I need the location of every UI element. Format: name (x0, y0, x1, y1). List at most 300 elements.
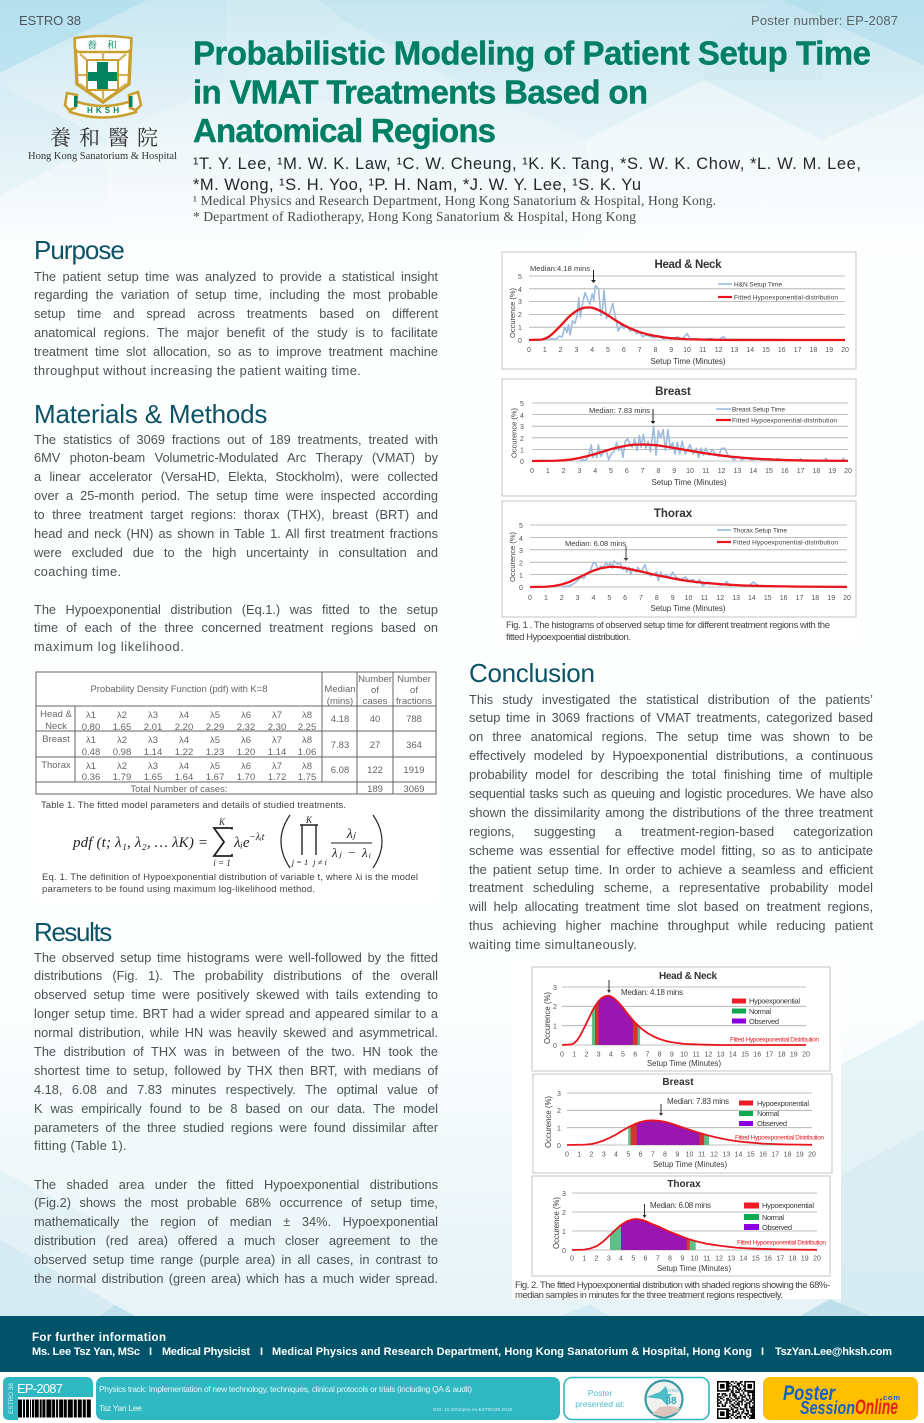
chart: Breast shaded distribution: 20 (808, 1152, 816, 1158)
chart: Thorax shaded distribution: Median: 6.08 mins (650, 1201, 711, 1210)
chart: Thorax shaded distribution: 8 (668, 1256, 672, 1262)
chart: Thorax setup time histogram: 19 (827, 595, 835, 602)
chart: Thorax setup time histogram: 5 (607, 595, 611, 602)
chart: Head & Neck setup time histogram: 1 (543, 347, 547, 354)
chart: Thorax setup time histogram: 9 (671, 595, 675, 602)
chart: Thorax shaded distribution: 6 (644, 1256, 648, 1262)
chart: Head & Neck setup time histogram: 3 (574, 347, 578, 354)
chart: Head & Neck shaded distribution: 15 (741, 1052, 749, 1058)
chart: Head & Neck shaded distribution: Median: 4.18 mins (621, 988, 683, 997)
chart: Thorax shaded distribution: 3 (562, 1191, 566, 1198)
text block: Purpose body: anatomical regions. The major benefit of the study is to facilitate (34, 325, 438, 340)
chart: Head & Neck setup time histogram: 0 (527, 347, 531, 354)
chart: Head & Neck shaded distribution: 4 (609, 1052, 613, 1058)
table 1: 1.65 (144, 772, 162, 783)
chart: Breast setup time histogram: Fitted Hypoexponential-distribution (732, 418, 837, 424)
text block: Conclusion body: waiting time simultaneously. (469, 937, 637, 952)
table 1: 1919 (403, 765, 425, 776)
text block: Conclusion body: sequential tasks such as queuing and logistic procedures. We have also (469, 786, 873, 801)
chart: Breast shaded distribution: 5 (626, 1152, 630, 1158)
chart: Breast shaded distribution: Setup Time (Minutes) (653, 1160, 727, 1169)
table 1: 1.14 (144, 747, 162, 758)
text block: Conclusion body: shown the dissimilarity among the distributions of the three treatment (469, 805, 873, 820)
chart: Head & Neck shaded distribution: 1 (553, 1024, 557, 1030)
chart: Breast shaded distribution: 12 (710, 1152, 718, 1158)
PosterSessionOnline logo (763, 1377, 918, 1420)
table 1: Number (397, 674, 431, 685)
text block: Results second paragraph: observed setup time range (purple area) in all cases, in contrast to (34, 1252, 438, 1267)
chart: Breast shaded distribution: 13 (722, 1152, 730, 1158)
chart: Breast setup time histogram: 3 (577, 468, 581, 475)
chart: Breast shaded distribution: 18 (784, 1152, 791, 1158)
chart: Thorax setup time histogram: 16 (780, 595, 788, 602)
affiliations (193, 193, 716, 224)
QR code (717, 1381, 755, 1419)
table 1: λ2 (117, 761, 127, 772)
footer contact band: I (149, 1346, 152, 1358)
table 1: λ5 (210, 761, 220, 772)
chart: Thorax setup time histogram: 18 (811, 595, 819, 602)
title: Anatomical Regions (193, 112, 496, 149)
chart: Head & Neck shaded distribution: 16 (753, 1052, 761, 1058)
text block: Hypoexponential fit: maximum log likelihood. (34, 639, 184, 654)
text block: Results first paragraph: fitting (Table 1). (34, 1138, 127, 1153)
chart: Head & Neck shaded distribution: 0 (553, 1043, 557, 1050)
chart: Breast setup time histogram: 0 (530, 468, 534, 475)
poster ID box with barcode: EP-2087 (17, 1381, 63, 1396)
chart: Breast setup time histogram: Breast Setup Time (732, 406, 785, 414)
chart: Thorax setup time histogram: 6 (623, 595, 627, 602)
chart: Thorax shaded distribution: 4 (619, 1256, 623, 1262)
table 1: cases (363, 696, 388, 707)
equation 1: j = 1 (291, 857, 308, 867)
chart: Thorax setup time histogram: 5 (519, 523, 523, 530)
chart: Breast setup time histogram: 4 (520, 413, 524, 420)
chart: Breast shaded distribution: 9 (675, 1152, 679, 1158)
chart: Head & Neck setup time histogram: 15 (762, 347, 770, 354)
figure 1 caption (506, 620, 830, 643)
table 1: λ8 (302, 735, 312, 746)
text block: Results second paragraph: distribution (red area) offered a much closer agreement to the (34, 1233, 438, 1248)
chart: Head & Neck shaded distribution: Head & Neck (659, 971, 717, 982)
text block: Results second paragraph (34, 1176, 438, 1286)
table 1: 364 (406, 740, 422, 751)
text block: Hypoexponential fit: The Hypoexponential distribution (Eq.1.) was fitted to the setup (34, 602, 438, 616)
chart: Head & Neck setup time histogram: 11 (699, 347, 707, 354)
table 1: 189 (367, 784, 383, 795)
chart: Breast shaded distribution: 17 (771, 1152, 779, 1158)
table 1: of (371, 685, 379, 696)
chart: Thorax shaded distribution: 17 (776, 1256, 784, 1262)
chart: Thorax shaded distribution: 5 (631, 1256, 635, 1262)
icon: ESTRO 38 badge: ESTRO (664, 1388, 678, 1393)
chart: Thorax setup time histogram: Median: 6.08 mins (565, 539, 626, 548)
chart: Thorax setup time histogram: 2 (519, 560, 523, 568)
chart: Thorax setup time histogram: 4 (591, 595, 595, 602)
affiliations: * Department of Radiotherapy, Hong Kong Sanatorium & Hospital, Hong Kong (193, 209, 636, 224)
chart: Thorax shaded distribution: 20 (813, 1256, 821, 1262)
chart: Thorax shaded distribution: Thorax (667, 1179, 701, 1190)
poster ID box with barcode: ESTRO 38 (8, 1383, 15, 1414)
chart: Head & Neck shaded distribution: 1 (572, 1052, 576, 1058)
heading: Materials & Methods: Materials & Methods (34, 399, 267, 429)
text block: Conclusion body: probability model for describing the total finishing time of multiple (469, 767, 873, 782)
chart: Breast setup time histogram: 3 (520, 424, 524, 431)
text block: Purpose body (34, 268, 438, 378)
chart: Head & Neck shaded distribution: 12 (705, 1052, 712, 1058)
panel: Materials & Methods (34, 399, 438, 654)
text block: Conclusion body: the patient setup time. In order to achieve a seamless and efficient (469, 862, 873, 877)
chart: Head & Neck setup time histogram: Occurence (%) (508, 287, 517, 338)
chart: Breast setup time histogram (502, 379, 856, 496)
chart: Head & Neck setup time histogram: 20 (841, 347, 849, 354)
chart: Head & Neck setup time histogram: 4 (518, 287, 522, 294)
affiliations: ¹ Medical Physics and Research Department, Hong Kong Sanatorium & Hospital, Hong Kong. (193, 193, 716, 208)
chart: Thorax setup time histogram: Occurence (%) (508, 531, 517, 582)
chart: Breast shaded distribution: 15 (747, 1152, 755, 1158)
text block: Results first paragraph: The observed setup time histograms were well-followed by the fitted (34, 950, 438, 964)
chart: Thorax shaded distribution: 12 (715, 1256, 723, 1262)
table 1: λ6 (241, 710, 251, 721)
chart: Thorax setup time histogram: 1 (544, 595, 548, 602)
footer contact band: Ms. Lee Tsz Yan, MSc (32, 1346, 140, 1358)
table 1: Thorax (41, 760, 71, 771)
panel: Results (34, 917, 438, 1286)
equation 1: λᵢe (233, 835, 250, 851)
table 1: 0.48 (82, 747, 100, 758)
table 1: 2.01 (144, 722, 162, 733)
chart: Thorax setup time histogram: 3 (519, 548, 523, 555)
table 1: λ1 (86, 710, 96, 721)
icon: hospital crest: HKSH (87, 106, 119, 115)
text block: Materials body: a linear accelerator (VersaHD, Elekta, Stockholm), were collected (34, 469, 438, 484)
title (193, 34, 871, 149)
chart: Breast shaded distribution: Observed (757, 1119, 787, 1128)
text block: Conclusion body (469, 692, 873, 952)
chart: Thorax setup time histogram: 4 (519, 536, 523, 543)
table 1: 7.83 (331, 740, 349, 751)
header labels (19, 13, 898, 28)
figure 2 caption (515, 1280, 830, 1301)
chart: Thorax shaded distribution: 14 (740, 1256, 747, 1262)
header labels: Poster number: EP-2087 (751, 13, 898, 28)
chart: Breast setup time histogram: 11 (702, 468, 710, 475)
chart: Head & Neck setup time histogram: 16 (778, 347, 786, 354)
table 1: Number (358, 674, 392, 685)
chart: Thorax shaded distribution: 2 (562, 1210, 566, 1217)
logo: Hong Kong Sanatorium & Hospital (28, 36, 177, 162)
title: Probabilistic Modeling of Patient Setup Time (193, 34, 871, 72)
equation 1: −λᵢt (249, 832, 265, 843)
chart: Breast shaded distribution: 1 (557, 1126, 561, 1132)
logo: Hong Kong Sanatorium & Hospital: Hong Kong Sanatorium & Hospital (28, 151, 177, 162)
PosterSessionOnline logo: .com (880, 1393, 900, 1402)
table 1: λ4 (179, 710, 189, 721)
chart: Breast setup time histogram: 13 (734, 468, 741, 475)
chart: Thorax setup time histogram: 17 (796, 595, 803, 602)
chart: Breast setup time histogram: Setup Time (Minutes) (652, 478, 727, 487)
text block: Materials body: 6MV photon-beam Volumetric-Modulated Arc Therapy (VMAT) by (34, 450, 438, 465)
chart: Thorax shaded distribution: 10 (691, 1256, 698, 1262)
chart: Thorax setup time histogram: 13 (732, 595, 740, 602)
equation 1: λⱼ (346, 827, 357, 842)
chart: Breast shaded distribution: 1 (577, 1152, 581, 1158)
text block: Materials body (34, 432, 438, 579)
text block: Materials body: head and neck (HN) as shown in Table 1. All first treatment fractions (34, 526, 438, 541)
chart: Head & Neck setup time histogram: 2 (559, 347, 563, 354)
chart: Breast shaded distribution: 14 (735, 1152, 742, 1158)
chart: Head & Neck setup time histogram: 0 (518, 338, 522, 345)
chart: Breast setup time histogram: 18 (813, 468, 820, 475)
table 1: 1.20 (237, 747, 255, 758)
footer contact band: For further information (32, 1332, 166, 1344)
table 1: (mins) (327, 696, 353, 707)
footer contact band: TszYan.Lee@hksh.com (775, 1346, 892, 1358)
text block: Conclusion body: This study investigated the statistical distribution of the patients’ (469, 692, 873, 706)
chart: Thorax shaded distribution: 15 (752, 1256, 760, 1262)
chart: Breast shaded distribution: 3 (557, 1091, 561, 1098)
text block: Conclusion body: effectively modeled by Hypoexponential distributions, a continuous (469, 748, 873, 763)
poster presented at box: presented at: (575, 1399, 625, 1409)
chart: Head & Neck setup time histogram: 2 (518, 312, 522, 319)
chart: Head & Neck setup time histogram: 5 (606, 347, 610, 354)
chart: Thorax shaded distribution: 2 (595, 1256, 599, 1262)
chart: Head & Neck setup time histogram: 5 (518, 274, 522, 281)
table 1: λ2 (117, 710, 127, 721)
chart: Thorax setup time histogram: 15 (764, 595, 772, 602)
chart: Thorax setup time histogram: 14 (748, 595, 756, 602)
text block: Results first paragraph (34, 950, 438, 1153)
chart: Head & Neck setup time histogram: 12 (715, 347, 723, 354)
text block: Purpose body: The patient setup time was analyzed to provide a statistical insight (34, 268, 438, 284)
chart: Head & Neck shaded distribution (532, 967, 830, 1071)
chart: Head & Neck shaded distribution: 17 (766, 1052, 773, 1058)
chart: Breast setup time histogram: Breast (655, 386, 691, 398)
table 1: λ7 (272, 710, 282, 721)
chart: Breast setup time histogram: 10 (686, 468, 694, 475)
chart: Breast shaded distribution: Fitted Hypoexponential Distribution (735, 1134, 824, 1142)
text block: Results second paragraph: the normal distribution (green area) which has a much wider spread. (34, 1271, 438, 1286)
text block: Purpose body: treatment time slot allocation, so as to improve treatment machine (34, 344, 438, 359)
chart: Breast setup time histogram: 9 (672, 468, 676, 475)
text block: Conclusion body: regions, suggesting a treatment-region-based categorization (469, 824, 873, 839)
text block: Results first paragraph: K was empirically found to be 8 based on our data. The model (34, 1101, 438, 1116)
table 1: 1.75 (298, 772, 316, 783)
PosterSessionOnline logo: Online (855, 1396, 898, 1419)
table 1: Probability Density Function (pdf) with K=8 (90, 684, 268, 695)
chart: Breast shaded distribution: 7 (651, 1152, 655, 1158)
text block: Results first paragraph: observed setup time were positively skewed with tails extending to (34, 987, 438, 1002)
heading: Conclusion: Conclusion (469, 658, 595, 688)
chart: Breast setup time histogram: 14 (749, 468, 757, 475)
chart: Breast setup time histogram: 16 (781, 468, 789, 475)
chart: Head & Neck shaded distribution: 6 (633, 1052, 637, 1058)
equation 1: λⱼ − λᵢ (331, 845, 371, 860)
chart: Head & Neck shaded distribution: 19 (790, 1052, 798, 1058)
text block: Purpose body: regarding the variation of setup time, including the most probable (34, 287, 438, 302)
track information box: Physics track: Implementation of new technology, techniques, clinical protocols or trials (including QA & audit) (99, 1384, 472, 1394)
chart: Thorax shaded distribution: 9 (680, 1256, 684, 1262)
text block: Conclusion body: treatment scheduling scheme, a representative probability model (469, 880, 873, 895)
chart: Thorax shaded distribution: Normal (762, 1213, 784, 1222)
chart: Head & Neck setup time histogram: Setup Time (Minutes) (650, 357, 726, 366)
text block: Purpose body: throughput without increasing the patient waiting time. (34, 363, 361, 378)
chart: Head & Neck setup time histogram: 13 (731, 347, 738, 354)
chart: Breast setup time histogram: 6 (625, 468, 629, 475)
chart: Head & Neck shaded distribution: Setup Time (Minutes) (647, 1059, 721, 1068)
chart: Thorax setup time histogram: 12 (716, 595, 724, 602)
chart: Thorax setup time histogram (502, 501, 856, 617)
text block: Conclusion body: scheme was essential for effective model fitting, so as to anticipate (469, 843, 873, 858)
chart: Head & Neck setup time histogram: Median:4.18 mins (530, 264, 590, 273)
table 1: 1.72 (268, 772, 286, 783)
chart: Breast shaded distribution: 11 (698, 1152, 706, 1158)
table 1 (34, 669, 439, 901)
equation 1: i = 1 (213, 858, 231, 868)
chart: Breast shaded distribution: 2 (557, 1108, 561, 1115)
table 1: λ1 (86, 735, 96, 746)
equation caption (42, 872, 418, 895)
text block: Results second paragraph: (Fig.2) shows the most probable 68% occurrence of setup time, (34, 1195, 438, 1210)
text block: Results first paragraph: longer setup time. BRT had a wider spread and appeared similar to a (34, 1006, 438, 1021)
chart: Thorax shaded distribution: Setup Time (Minutes) (657, 1264, 731, 1273)
text block: Results first paragraph: distributions (Fig. 1). The probability distributions of the overall (34, 968, 438, 983)
chart: Thorax shaded distribution: 7 (656, 1256, 660, 1262)
chart: Thorax shaded distribution: Hypoexponential (762, 1201, 814, 1210)
chart: Breast setup time histogram: 1 (520, 448, 524, 454)
chart: Breast shaded distribution: 0 (565, 1152, 569, 1158)
chart: Head & Neck shaded distribution: 10 (680, 1052, 688, 1058)
chart: Head & Neck setup time histogram: 17 (794, 347, 802, 354)
chart: Thorax setup time histogram: 0 (528, 595, 532, 602)
chart: Thorax shaded distribution: 0 (570, 1256, 574, 1262)
text block: Results first paragraph: shortest time to setup, followed by THX then BRT, with medians of (34, 1063, 438, 1078)
equation 1: pdf (t; λ₁, λ₂, … λK) = (72, 835, 208, 851)
chart: Head & Neck shaded distribution: 0 (560, 1052, 564, 1058)
table 1: λ7 (272, 761, 282, 772)
text block: Materials body: over a 25-month period. The setup time were inspected according (34, 488, 438, 503)
table 1: λ5 (210, 735, 220, 746)
text block: Materials body: coaching time. (34, 564, 121, 579)
icon: ESTRO 38 badge (646, 1380, 682, 1418)
chart: Head & Neck shaded distribution: 18 (778, 1052, 786, 1058)
poster presented at box (564, 1378, 709, 1420)
track information box (96, 1377, 560, 1420)
table 1: Total Number of cases: (130, 784, 228, 795)
text block: Results first paragraph: normal distribution, while HN was heavily skewed and asymmetrical. (34, 1025, 438, 1040)
chart: Breast shaded distribution: 10 (686, 1152, 693, 1158)
chart: Head & Neck shaded distribution: 2 (553, 1004, 557, 1011)
equation caption: parameters to be found using maximum log-likelihood method. (42, 884, 315, 895)
chart: Breast setup time histogram: 20 (844, 468, 852, 475)
chart: Thorax setup time histogram: Thorax (654, 508, 693, 520)
chart: Head & Neck shaded distribution: 14 (729, 1052, 737, 1058)
chart: Breast setup time histogram: 19 (828, 468, 836, 475)
table 1: 2.32 (237, 722, 255, 733)
table 1: 2.29 (206, 722, 224, 733)
poster presented at box: Poster (588, 1388, 612, 1398)
footer contact band: Medical Physics and Research Department, Hong Kong Sanatorium & Hospital, Hong Kong (272, 1346, 752, 1358)
chart: Head & Neck shaded distribution: Normal (749, 1007, 771, 1016)
chart: Head & Neck setup time histogram (502, 252, 856, 369)
chart: Head & Neck shaded distribution: Hypoexponential (749, 996, 800, 1006)
table 1: λ6 (241, 761, 251, 772)
table 1: 0.80 (82, 722, 100, 733)
chart: Breast setup time histogram: 5 (520, 401, 524, 408)
chart: Breast setup time histogram: 17 (797, 468, 805, 475)
table 1: 1.67 (206, 772, 224, 783)
title: in VMAT Treatments Based on (193, 74, 648, 110)
chart: Head & Neck setup time histogram: 9 (669, 347, 673, 354)
chart: Breast shaded distribution: 0 (557, 1143, 561, 1150)
chart: Head & Neck setup time histogram: 14 (746, 347, 754, 354)
chart: Thorax shaded distribution: 18 (789, 1256, 796, 1262)
chart: Breast shaded distribution: 6 (639, 1152, 643, 1158)
panel: Purpose (34, 235, 438, 378)
table 1: λ5 (210, 710, 220, 721)
text block: Materials body: The statistics of 3069 fractions out of 189 treatments, treated with (34, 432, 438, 446)
table 1: 122 (367, 765, 383, 776)
figure 2 caption: Fig. 2. The fitted Hypoexponential distribution with shaded regions showing the 68%- (515, 1280, 830, 1291)
chart: Thorax shaded distribution (532, 1176, 830, 1276)
chart: Breast setup time histogram: 1 (546, 468, 550, 475)
chart: Thorax shaded distribution: 11 (703, 1256, 711, 1262)
chart: Thorax shaded distribution: 1 (562, 1229, 566, 1236)
table 1: 0.98 (113, 747, 131, 758)
heading: Purpose: Purpose (34, 235, 124, 265)
text block: Hypoexponential fit (34, 602, 438, 654)
table 1: 4.18 (331, 714, 349, 725)
chart: Thorax shaded distribution: 13 (727, 1256, 735, 1262)
chart: Thorax setup time histogram: Thorax Setup Time (733, 528, 787, 534)
PosterSessionOnline logo: Session (800, 1398, 855, 1418)
footer contact band: I (260, 1346, 263, 1358)
table 1: λ8 (302, 710, 312, 721)
table 1: 788 (406, 714, 422, 725)
text block: Results second paragraph: mathematically the region of median ± 34%. Hypoexponential (34, 1214, 438, 1229)
chart: Thorax setup time histogram: 3 (576, 595, 580, 602)
text block: Results second paragraph: The shaded area under the fitted Hypoexponential distributions (34, 1176, 438, 1192)
chart: Breast setup time histogram: Occurence (%) (510, 407, 518, 458)
table 1: λ3 (148, 761, 158, 772)
chart: Head & Neck shaded distribution: Occurence (%) (543, 992, 552, 1044)
table 1: 2.25 (298, 722, 316, 733)
table 1: λ3 (148, 710, 158, 721)
table 1: 2.30 (268, 722, 286, 733)
chart: Thorax shaded distribution: 0 (562, 1248, 566, 1255)
chart: Head & Neck setup time histogram: 7 (638, 347, 642, 354)
chart: Head & Neck setup time histogram: 8 (653, 347, 657, 354)
chart: Head & Neck shaded distribution: 13 (717, 1052, 725, 1058)
table 1: 1.70 (237, 772, 255, 783)
chart: Thorax setup time histogram: Setup Time (Minutes) (650, 604, 726, 613)
chart: Breast shaded distribution: Hypoexponential (757, 1099, 809, 1108)
chart: Head & Neck setup time histogram: Fitted Hypoexponential-distribution (734, 294, 838, 302)
chart: Thorax setup time histogram: 1 (519, 573, 523, 580)
chart: Head & Neck setup time histogram: H&N Setup Time (734, 282, 782, 288)
chart: Thorax setup time histogram: 2 (560, 595, 564, 602)
table 1: 1.79 (113, 772, 131, 783)
table 1: 1.23 (206, 747, 224, 758)
chart: Head & Neck setup time histogram: 4 (590, 347, 594, 354)
chart: Head & Neck setup time histogram: 10 (683, 347, 691, 354)
figure 1 caption: fitted Hypoexpoential distribution. (506, 632, 631, 643)
panel: Conclusion (469, 658, 873, 952)
chart: Breast setup time histogram: Median: 7.83 mins (589, 406, 650, 415)
chart: Head & Neck shaded distribution: 20 (802, 1052, 810, 1058)
authors: ¹T. Y. Lee, ¹M. W. K. Law, ¹C. W. Cheung, ¹K. K. Tang, *S. W. K. Chow, *L. W. M. Lee, (193, 155, 861, 173)
table 1: 1.65 (113, 722, 131, 733)
